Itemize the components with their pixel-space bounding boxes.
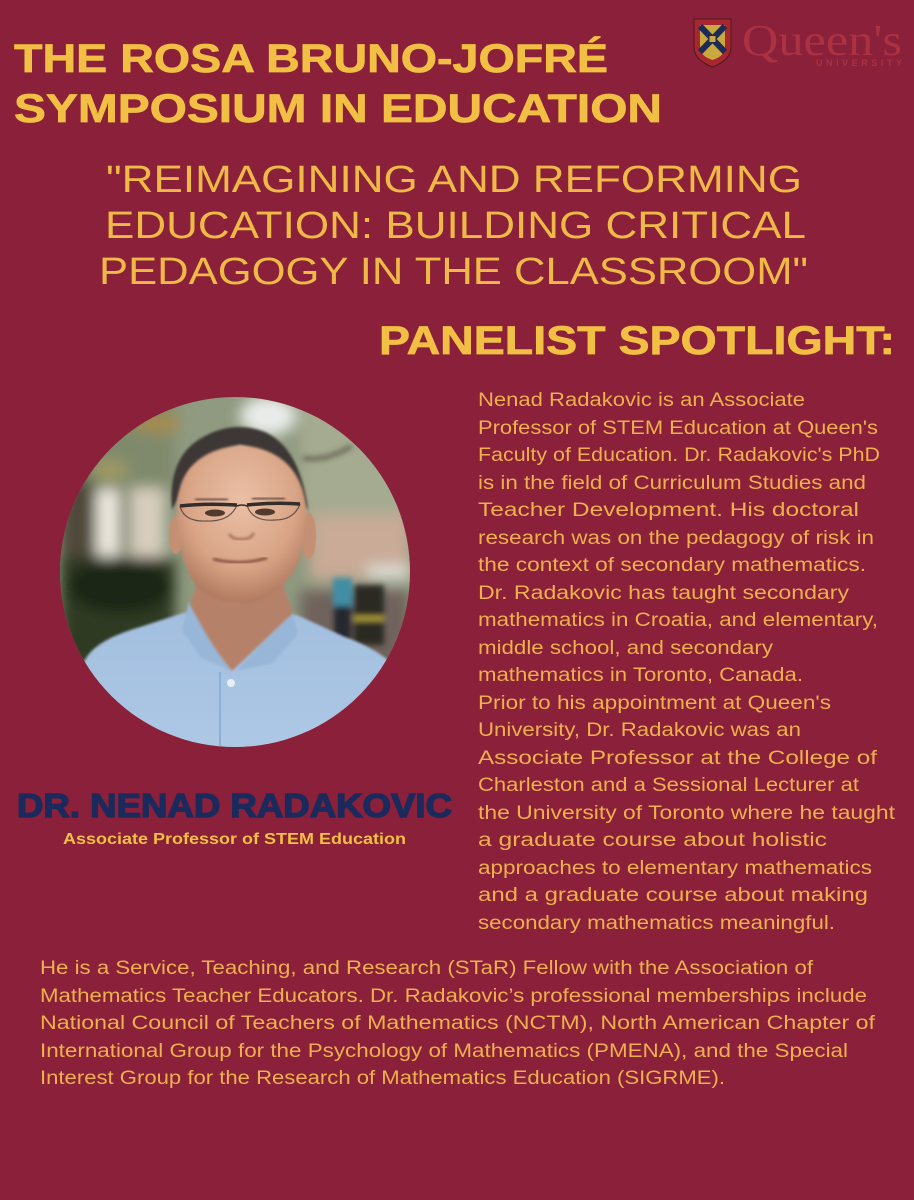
biography: right column: research was on the pedagogy of risk in xyxy=(478,528,874,549)
icon: crest shield xyxy=(694,19,731,67)
biography: right column: Professor of STEM Education at Queen's xyxy=(478,418,878,439)
title: THE ROSA BRUNO-JOFRÉ xyxy=(14,36,608,81)
wordmark: Queen's xyxy=(742,16,902,65)
biography: right column: mathematics in Toronto, Canada. xyxy=(478,665,803,686)
shirt xyxy=(84,602,388,747)
title xyxy=(14,36,662,131)
eyes xyxy=(205,510,225,516)
biography: right column: a graduate course about holistic xyxy=(478,830,827,851)
subtitle: PEDAGOGY IN THE CLASSROOM" xyxy=(99,251,808,293)
biography: right column: is in the field of Curriculum Studies and xyxy=(478,473,866,494)
biography: right column: Dr. Radakovic has taught secondary xyxy=(478,583,850,604)
biography: right column: the University of Toronto where he taught xyxy=(478,803,896,824)
biography: lower paragraph xyxy=(40,958,876,1089)
face xyxy=(177,445,306,603)
biography: right column: Prior to his appointment at Queen's xyxy=(478,693,831,714)
logo: Queen's University: UNIVERSITY xyxy=(816,58,902,68)
neck xyxy=(190,585,293,671)
biography: lower paragraph: He is a Service, Teaching, and Research (STaR) Fellow with the Association of xyxy=(40,958,814,979)
subtitle xyxy=(99,159,808,293)
biography: lower paragraph: National Council of Teachers of Mathematics (NCTM), North American Chapter of xyxy=(40,1013,876,1034)
biography: right column: Teacher Development. His doctoral xyxy=(478,500,859,521)
biography: right column: University, Dr. Radakovic was an xyxy=(478,720,801,741)
glasses xyxy=(180,503,300,521)
mouth xyxy=(213,558,267,562)
biography: lower paragraph: Mathematics Teacher Educators. Dr. Radakovic’s professional memberships include xyxy=(40,986,867,1007)
biography: right column: Charleston and a Sessional Lecturer at xyxy=(478,775,860,796)
title: SYMPOSIUM IN EDUCATION xyxy=(14,87,662,131)
biography: right column: mathematics in Croatia, and elementary, xyxy=(478,610,878,631)
biography: right column xyxy=(478,390,896,934)
biography: right column: the context of secondary mathematics. xyxy=(478,555,866,576)
job title: Associate Professor of STEM Education xyxy=(63,831,406,848)
subtitle: EDUCATION: BUILDING CRITICAL xyxy=(105,205,806,247)
hair xyxy=(171,427,308,510)
ears xyxy=(169,516,182,554)
biography: right column: middle school, and secondary xyxy=(478,638,774,659)
logo: Queen's University xyxy=(694,16,902,68)
nose xyxy=(229,533,254,539)
biography: lower paragraph: International Group for the Psychology of Mathematics (PMENA), and the Special xyxy=(40,1041,848,1062)
biography: right column: approaches to elementary mathematics xyxy=(478,858,872,879)
portrait photo xyxy=(60,396,420,760)
biography: right column: Nenad Radakovic is an Associate xyxy=(478,390,805,411)
biography: right column: Faculty of Education. Dr. Radakovic's PhD xyxy=(478,445,880,466)
biography: right column: and a graduate course about making xyxy=(478,885,868,906)
biography: right column: Associate Professor at the College of xyxy=(478,748,878,769)
name: DR. NENAD RADAKOVIC xyxy=(17,787,452,824)
eyebrows xyxy=(195,498,285,500)
subtitle: "REIMAGINING AND REFORMING xyxy=(106,159,802,201)
biography: right column: secondary mathematics meaningful. xyxy=(478,913,835,934)
biography: lower paragraph: Interest Group for the Research of Mathematics Education (SIGRME). xyxy=(40,1068,725,1089)
heading: panelist spotlight: PANELIST SPOTLIGHT: xyxy=(379,319,895,363)
